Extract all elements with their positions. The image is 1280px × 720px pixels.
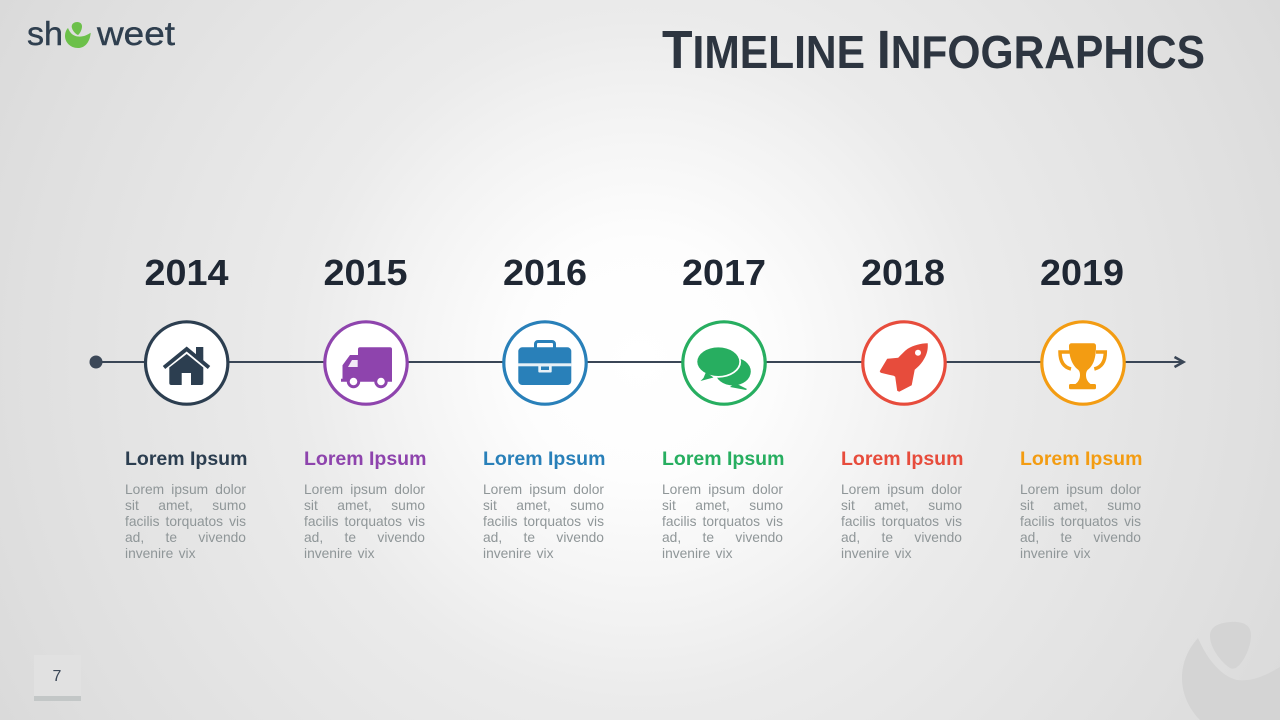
- text block: 2016: [483, 448, 605, 560]
- text block: 2019: Lorem ipsum dolor: [1020, 482, 1141, 496]
- logo: [27, 15, 175, 52]
- text block: 2015: [304, 448, 426, 560]
- text block: 2018: sit amet, sumo: [841, 498, 962, 512]
- text block: 2018: [841, 448, 963, 560]
- milestone 2018: 2018: [861, 252, 945, 293]
- text block: 2018: ad, te vivendo: [841, 530, 962, 544]
- logo mark: [65, 22, 91, 48]
- text block: 2015: facilis torquatos vis: [304, 514, 425, 528]
- text block: 2018: facilis torquatos vis: [841, 514, 962, 528]
- text block: 2016: invenire vix: [483, 546, 554, 560]
- page number: 7: [53, 668, 62, 685]
- text block: 2016: sit amet, sumo: [483, 498, 604, 512]
- text block: 2016: Lorem ipsum dolor: [483, 482, 604, 496]
- timeline axis with arrow: [90, 356, 1184, 368]
- text block: 2016: facilis torquatos vis: [483, 514, 604, 528]
- text block: 2015: Lorem Ipsum: [304, 448, 426, 470]
- text block: 2018: Lorem ipsum dolor: [841, 482, 962, 496]
- text block: 2017: ad, te vivendo: [662, 530, 783, 544]
- text block: 2019: ad, te vivendo: [1020, 530, 1141, 544]
- text block: 2017: facilis torquatos vis: [662, 514, 783, 528]
- text block: 2017: Lorem ipsum dolor: [662, 482, 783, 496]
- text block: 2015: Lorem ipsum dolor: [304, 482, 425, 496]
- text block: 2015: sit amet, sumo: [304, 498, 425, 512]
- text block: 2017: [662, 448, 784, 560]
- icon: house: [164, 347, 209, 385]
- text block: 2018: Lorem Ipsum: [841, 448, 963, 470]
- milestone 2017: 2017: [682, 252, 766, 293]
- text block: 2019: [1020, 448, 1142, 560]
- text block: 2014: sit amet, sumo: [125, 498, 246, 512]
- text block: 2014: [125, 448, 247, 560]
- icon: chat bubbles: [696, 346, 751, 390]
- title: TIMELINE INFOGRAPHICS: [662, 20, 1205, 80]
- milestone 2019: [1040, 252, 1124, 404]
- text block: 2016: ad, te vivendo: [483, 530, 604, 544]
- text block: 2014: ad, te vivendo: [125, 530, 246, 544]
- milestone 2016: [503, 252, 587, 404]
- logo: weet: [96, 15, 175, 52]
- text block: 2016: Lorem Ipsum: [483, 448, 605, 470]
- milestone 2014: [144, 252, 228, 404]
- text block: 2017: invenire vix: [662, 546, 733, 560]
- text block: 2015: invenire vix: [304, 546, 375, 560]
- text block: 2014: Lorem ipsum dolor: [125, 482, 246, 496]
- text block: 2019: sit amet, sumo: [1020, 498, 1141, 512]
- milestone 2019: 2019: [1040, 252, 1124, 293]
- icon: delivery truck: [341, 347, 392, 388]
- logo: sh: [27, 15, 63, 52]
- text block: 2014: Lorem Ipsum: [125, 448, 247, 470]
- milestone 2016: 2016: [503, 252, 587, 293]
- text block: 2019: invenire vix: [1020, 546, 1091, 560]
- page number: [34, 655, 81, 701]
- icon: briefcase: [518, 342, 572, 385]
- text block: 2017: Lorem Ipsum: [662, 448, 784, 470]
- text block: 2019: facilis torquatos vis: [1020, 514, 1141, 528]
- text block: 2015: ad, te vivendo: [304, 530, 425, 544]
- milestone 2014: 2014: [144, 252, 228, 293]
- text block: 2017: sit amet, sumo: [662, 498, 783, 512]
- milestone 2018: [861, 252, 945, 404]
- text block: 2019: Lorem Ipsum: [1020, 448, 1142, 470]
- milestone 2015: [324, 252, 408, 404]
- milestone 2015: 2015: [324, 252, 408, 293]
- text block: 2018: invenire vix: [841, 546, 912, 560]
- text block: 2014: facilis torquatos vis: [125, 514, 246, 528]
- watermark logo: [1182, 622, 1280, 720]
- icon: trophy: [1060, 343, 1105, 389]
- icon: rocket: [880, 343, 928, 392]
- milestone 2017: [682, 252, 766, 404]
- text block: 2014: invenire vix: [125, 546, 196, 560]
